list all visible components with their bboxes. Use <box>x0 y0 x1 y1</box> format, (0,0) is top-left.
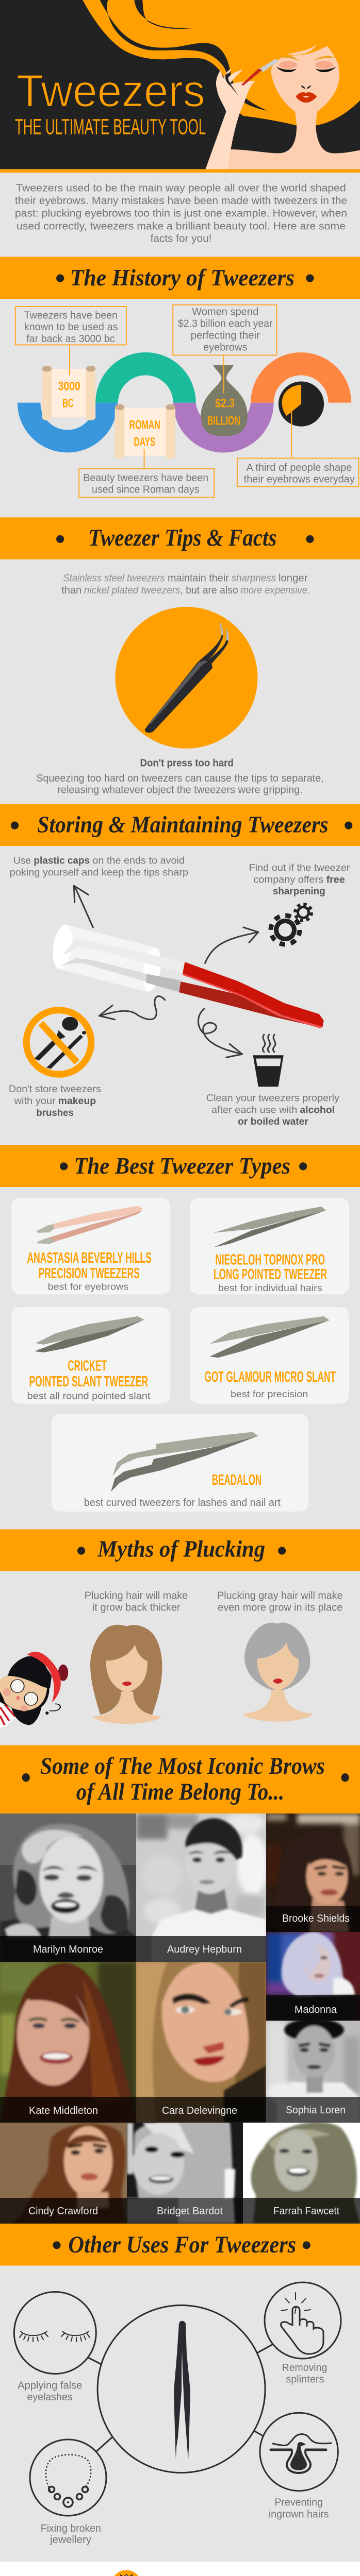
card: Anastasia: best for eyebrows <box>48 1281 128 1292</box>
tip: plastic caps: poking yourself and keep the tips sharp <box>10 867 188 878</box>
pie chart: one third <box>279 381 324 427</box>
section: storing and maintaining <box>0 804 360 1127</box>
money bag: BILLION <box>207 413 240 427</box>
card: Beadalon: best curved tweezers for lashes and nail art <box>84 1497 281 1509</box>
tip: plastic caps: plastic caps <box>34 855 90 866</box>
icon: necklace circle <box>30 2439 106 2516</box>
card: Beadalon: BEADALON <box>212 1472 261 1488</box>
tip: clean your tweezers <box>206 1093 339 1127</box>
tip: don't press too hard <box>36 757 324 795</box>
card: Got Glamour <box>190 1307 349 1404</box>
label: fixing broken jewellery <box>41 2523 101 2546</box>
central tweezers circle <box>97 2305 265 2473</box>
card: Cricket: POINTED SLANT TWEEZER <box>29 1374 148 1390</box>
connectors <box>88 2345 272 2451</box>
card: Niegeloh <box>190 1198 349 1295</box>
caption <box>266 2097 360 2123</box>
steel vs nickel text: Stainless steel tweezers <box>63 572 165 584</box>
icon: eyelashes circle <box>14 2292 96 2374</box>
section: history of tweezers <box>0 257 360 497</box>
photo: Cara Delevingne <box>136 1962 266 2123</box>
heading band <box>0 1529 360 1571</box>
label: removing splinters: Removing <box>282 2362 327 2374</box>
callout: spending: perfecting their <box>190 330 260 341</box>
caption: Bridget Bardot <box>157 2206 223 2217</box>
steel vs nickel text: more expensive. <box>241 584 310 596</box>
steel vs nickel text: maintain their <box>168 572 229 584</box>
myth: gray hair <box>217 1590 343 1613</box>
label: applying false eyelashes: Applying false <box>18 2380 82 2391</box>
tip: makeup brushes: brushes <box>36 1108 74 1118</box>
label: removing splinters: splinters <box>286 2374 324 2385</box>
caption: Sophia Loren <box>286 2105 346 2116</box>
icon: ingrown hair circle <box>260 2413 338 2491</box>
steel vs nickel text: , but are also <box>180 584 238 596</box>
photo: Cindy Crawford <box>0 2123 127 2224</box>
caption <box>243 2198 360 2224</box>
photo: Marilyn Monroe <box>0 1814 136 1962</box>
gray haired head <box>243 1622 312 1722</box>
caption <box>136 1936 266 1962</box>
caption: Farrah Fawcett <box>273 2206 339 2217</box>
steel vs nickel text: longer <box>279 572 308 584</box>
section: best tweezer types <box>0 1145 360 1512</box>
tip: free sharpening <box>249 862 350 897</box>
label: applying false eyelashes: eyelashes <box>27 2392 73 2403</box>
tip: makeup brushes: with your <box>14 1095 56 1107</box>
tip: makeup brushes: Don't store tweezers <box>9 1083 101 1095</box>
tip: free sharpening: sharpening <box>273 886 325 897</box>
tip: free sharpening: Find out if the tweezer <box>249 862 350 873</box>
tip: plastic caps: on the ends to avoid <box>92 855 185 866</box>
tip: clean your tweezers: or boiled water <box>238 1116 308 1127</box>
intro text: facts for you! <box>151 233 211 244</box>
photo: Kate Middleton <box>0 1962 136 2123</box>
caption: Cindy Crawford <box>28 2206 98 2217</box>
caption: Kate Middleton <box>29 2105 98 2116</box>
callout: 3000 BC <box>15 307 126 375</box>
callout: spending: Women spend <box>192 306 258 317</box>
label: applying false eyelashes <box>18 2380 82 2403</box>
woman figure <box>205 41 360 169</box>
heading band <box>0 1145 360 1187</box>
photo: Brooke Shields <box>266 1814 360 1932</box>
tip: makeup brushes <box>9 1083 101 1118</box>
label: preventing ingrown hairs <box>269 2497 329 2520</box>
photo: Audrey Hepburn <box>136 1814 266 1962</box>
card: Cricket: CRICKET <box>68 1358 107 1375</box>
hair <box>83 0 360 125</box>
tip: free sharpening: free <box>326 874 345 885</box>
card: Beadalon <box>52 1414 308 1512</box>
tip: plastic caps: Use <box>13 855 31 866</box>
steel vs nickel text: nickel plated tweezers <box>84 584 180 596</box>
arrow to cup <box>198 1009 242 1057</box>
photo: Farrah Fawcett <box>243 2123 360 2224</box>
icon: gears <box>271 904 312 944</box>
card: Cricket <box>11 1307 170 1404</box>
label: removing splinters <box>282 2362 327 2385</box>
brunette head <box>90 1625 162 1724</box>
scroll: Roman days: ROMAN <box>129 417 160 431</box>
steel vs nickel text: sharpness <box>232 572 276 584</box>
card: Anastasia: ANASTASIA BEVERLY HILLS <box>27 1250 152 1266</box>
callout: spending: eyebrows <box>203 342 247 353</box>
no-brushes sign <box>26 1010 91 1074</box>
icon: splinter finger circle <box>265 2282 341 2359</box>
steel vs nickel text: than <box>61 584 81 596</box>
money bag <box>201 365 248 436</box>
caption <box>0 1936 136 1962</box>
callout: 3000 BC: Tweezers have been <box>24 310 118 321</box>
tip: free sharpening: company offers <box>253 874 323 885</box>
arrow to caps tip <box>74 886 93 927</box>
arrow to gears <box>205 927 258 963</box>
photo: Bridget Bardot <box>127 2123 243 2224</box>
label: fixing broken jewellery: jewellery <box>50 2534 92 2546</box>
photo: Madonna <box>266 1932 360 2021</box>
tip: clean your tweezers: alcohol <box>300 1105 335 1115</box>
card: Cricket: best all round pointed slant <box>27 1391 151 1401</box>
caption <box>127 2198 243 2224</box>
heading band: Tweezer Tips & Facts <box>88 525 276 551</box>
caption <box>0 2198 127 2224</box>
header panel <box>0 0 360 244</box>
callout: 3000 BC: known to be used as <box>24 321 118 332</box>
heading band <box>0 257 360 299</box>
caption: Brooke Shields <box>282 1913 350 1924</box>
caption <box>266 1906 360 1932</box>
section: tips and facts <box>0 517 360 795</box>
label: preventing ingrown hairs: Preventing <box>274 2497 323 2508</box>
tip: plastic caps <box>10 855 188 878</box>
tip: don't press too hard: Don't press too hard <box>140 757 234 769</box>
photo: Sophia Loren <box>266 2021 360 2123</box>
section: other uses heading <box>0 2224 360 2265</box>
intro text <box>15 182 347 244</box>
myth: grow back thicker: it grow back thicker <box>92 1602 181 1613</box>
scroll: Roman days: DAYS <box>134 435 155 449</box>
arrow to brushes <box>99 996 165 1020</box>
caption <box>136 2097 266 2123</box>
callout: Roman days: Beauty tweezers have been <box>83 472 208 483</box>
myth: grow back thicker: Plucking hair will make <box>85 1590 188 1601</box>
capped red tweezers <box>50 924 324 1028</box>
tip: clean your tweezers: after each use with <box>211 1105 297 1115</box>
card: Niegeloh: best for individual hairs <box>218 1282 322 1293</box>
caption <box>266 1995 360 2021</box>
callout: a third of people <box>237 412 358 486</box>
title: Tweezers <box>17 65 205 116</box>
scroll: 3000 BC: 3000 <box>58 379 80 393</box>
icon: cow logo <box>111 2570 141 2576</box>
caption: Madonna <box>294 2004 337 2015</box>
heading band: Myths of Plucking <box>97 1536 265 1562</box>
callout: 3000 BC: far back as 3000 bc <box>26 333 115 344</box>
callout: Roman days <box>79 449 214 497</box>
caption: Audrey Hepburn <box>167 1944 242 1955</box>
heading band <box>0 804 360 846</box>
card: Anastasia: PRECISION TWEEZERS <box>39 1265 140 1282</box>
section: other uses labels <box>18 2362 350 2576</box>
tip: clean your tweezers: Clean your tweezers properly <box>206 1093 339 1104</box>
callout: Roman days: used since Roman days <box>92 484 199 495</box>
label: preventing ingrown hairs: ingrown hairs <box>269 2509 329 2520</box>
callout: spending: $2.3 billion each year <box>178 318 273 329</box>
steel vs nickel text <box>61 572 310 596</box>
tip: don't press too hard: releasing whatever object the tweezers were gripping. <box>57 784 303 795</box>
section: iconic brows heading: of All Time Belong To... <box>76 1779 284 1805</box>
caption: Marilyn Monroe <box>33 1944 103 1955</box>
callout: spending <box>173 305 276 393</box>
scroll: Roman days <box>115 404 175 459</box>
diagram: other uses <box>14 2282 341 2516</box>
caption: Cara Delevingne <box>162 2105 237 2116</box>
wave chart <box>18 352 351 453</box>
icon: steaming cup <box>253 1035 284 1087</box>
heading band: The Best Tweezer Types <box>74 1153 290 1179</box>
myth: grow back thicker <box>85 1590 188 1613</box>
caption <box>0 2097 136 2123</box>
label: fixing broken jewellery: Fixing broken <box>41 2523 101 2534</box>
cartoon girl <box>0 1652 68 1727</box>
section: myths of plucking <box>0 1529 360 1727</box>
card: Anastasia <box>11 1198 170 1295</box>
tip: makeup brushes: makeup <box>58 1095 96 1107</box>
section: iconic brows heading <box>0 1745 360 1814</box>
scroll: 3000 BC: BC <box>62 396 73 410</box>
circle with black tweezers <box>115 607 257 749</box>
heading band <box>0 517 360 560</box>
scroll: 3000 BC <box>42 366 95 420</box>
card: Got Glamour: best for precision <box>231 1388 308 1399</box>
money bag: $2.3 <box>215 396 235 410</box>
